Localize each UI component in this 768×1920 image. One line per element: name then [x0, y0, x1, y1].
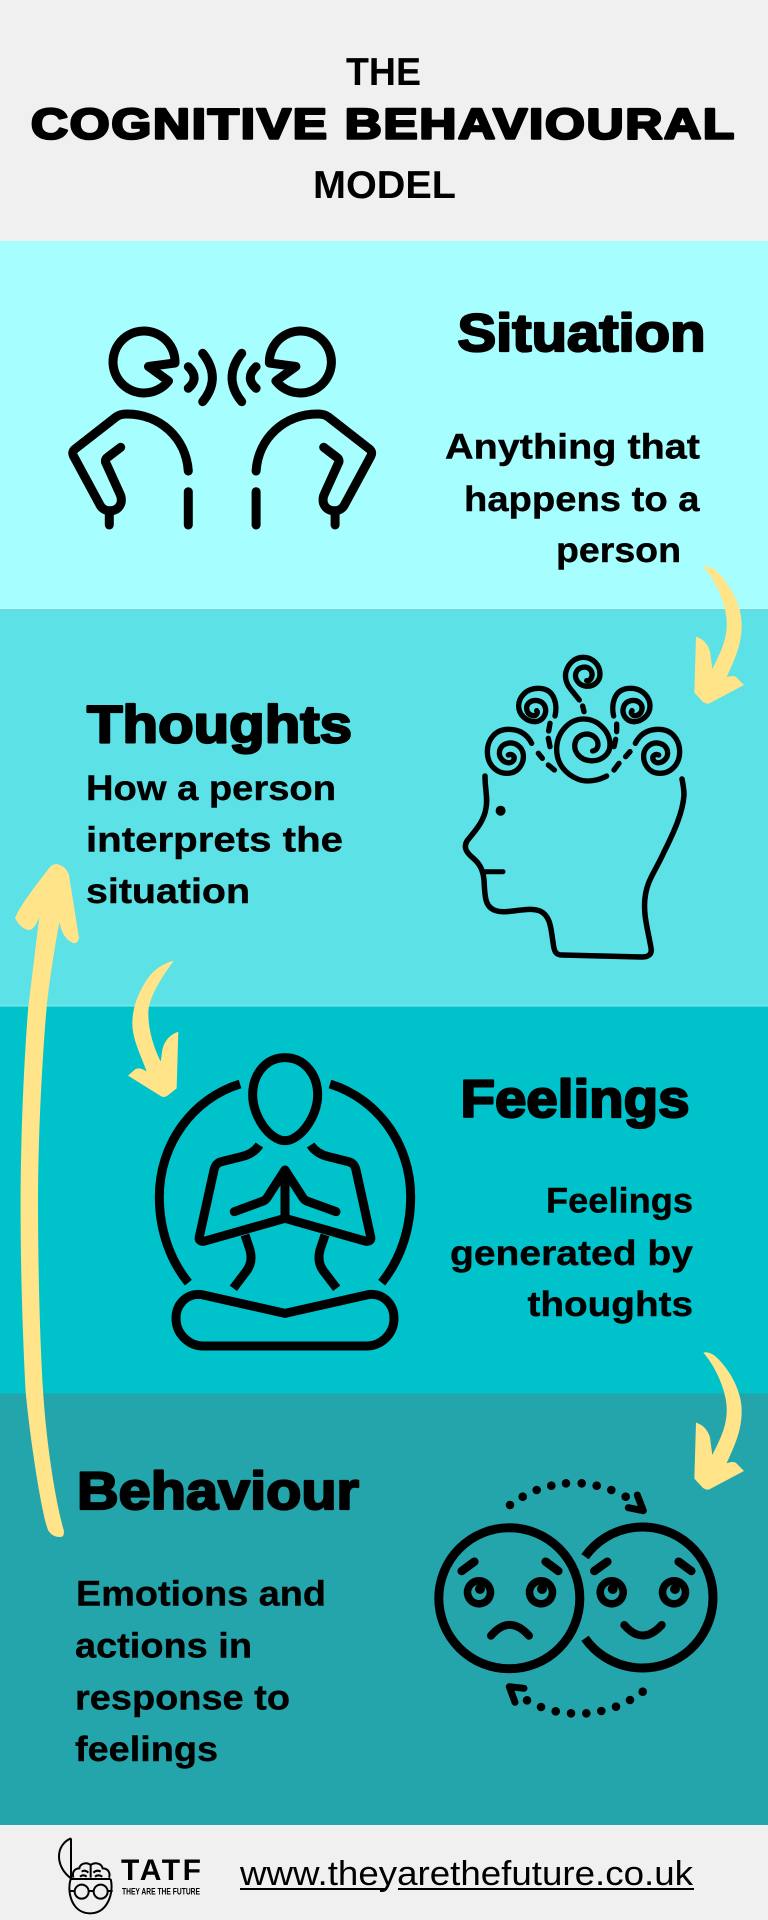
spiral: upper right	[613, 688, 650, 722]
text: behaviour description	[75, 1575, 326, 1769]
spiral: upper left	[519, 688, 556, 722]
dotted arrow: bottom	[509, 1687, 647, 1718]
panel: footer	[0, 1825, 768, 1920]
heading: Thoughts: Thoughts	[87, 696, 352, 754]
text: situation description	[445, 428, 700, 570]
spiral: left	[487, 729, 532, 773]
panel: behaviour	[0, 1394, 768, 1825]
title line: THE: THE	[346, 51, 421, 94]
spiral: right	[635, 729, 680, 773]
spirals	[487, 657, 680, 781]
panel: situation	[0, 241, 768, 608]
heading: Situation: Situation	[458, 304, 706, 363]
panel: feelings	[0, 1006, 768, 1394]
arrow: feelings to behaviour	[694, 1352, 744, 1490]
logo tagline: THEY ARE THE FUTURE	[122, 1886, 200, 1898]
logo icon: head with brain and glasses	[59, 1838, 113, 1913]
heading: Feelings: Feelings	[460, 1070, 690, 1129]
icon: meditating person	[159, 1058, 411, 1346]
text: thoughts description	[86, 769, 343, 911]
text: situation description: happens to a	[464, 480, 700, 519]
text: feelings description: generated by	[450, 1234, 694, 1273]
sad face	[439, 1528, 580, 1669]
icon: two people talking	[73, 331, 372, 525]
text: behaviour description: Emotions and	[76, 1575, 326, 1614]
arrow: behaviour back to thoughts	[15, 864, 79, 1537]
website link: www.theyarethefuture.co.uk	[239, 1855, 694, 1893]
text: feelings description	[450, 1182, 694, 1324]
dashes between spirals	[538, 706, 630, 770]
panel: title header	[0, 0, 768, 241]
logo text: TATF: TATF	[121, 1854, 201, 1887]
arrow: thoughts to feelings	[128, 961, 178, 1097]
text: feelings description: thoughts	[528, 1285, 693, 1324]
icon: head with spirals	[465, 657, 684, 957]
title line: COGNITIVE BEHAVIOURAL: COGNITIVE BEHAVIOURAL	[31, 100, 736, 148]
text: behaviour description: actions in	[75, 1627, 252, 1666]
heading: Behaviour: Behaviour	[77, 1462, 359, 1521]
text: thoughts description: situation	[86, 872, 250, 911]
text: thoughts description: How a person	[86, 769, 336, 808]
text: feelings description: Feelings	[546, 1182, 693, 1221]
spiral: centre	[557, 719, 610, 781]
arrow: situation to thoughts	[694, 566, 744, 704]
panel: thoughts	[0, 608, 768, 1006]
text: situation description: Anything that	[445, 428, 700, 466]
icon: sad and happy faces cycle	[439, 1479, 713, 1718]
title line: MODEL: MODEL	[313, 164, 456, 207]
text: behaviour description: feelings	[75, 1730, 218, 1769]
text: thoughts description: interprets the	[86, 820, 343, 860]
spiral: top	[565, 657, 600, 700]
happy face	[585, 1527, 713, 1668]
dotted arrow: top	[506, 1479, 643, 1511]
text: behaviour description: response to	[75, 1678, 290, 1718]
text: situation description: person	[556, 531, 681, 570]
